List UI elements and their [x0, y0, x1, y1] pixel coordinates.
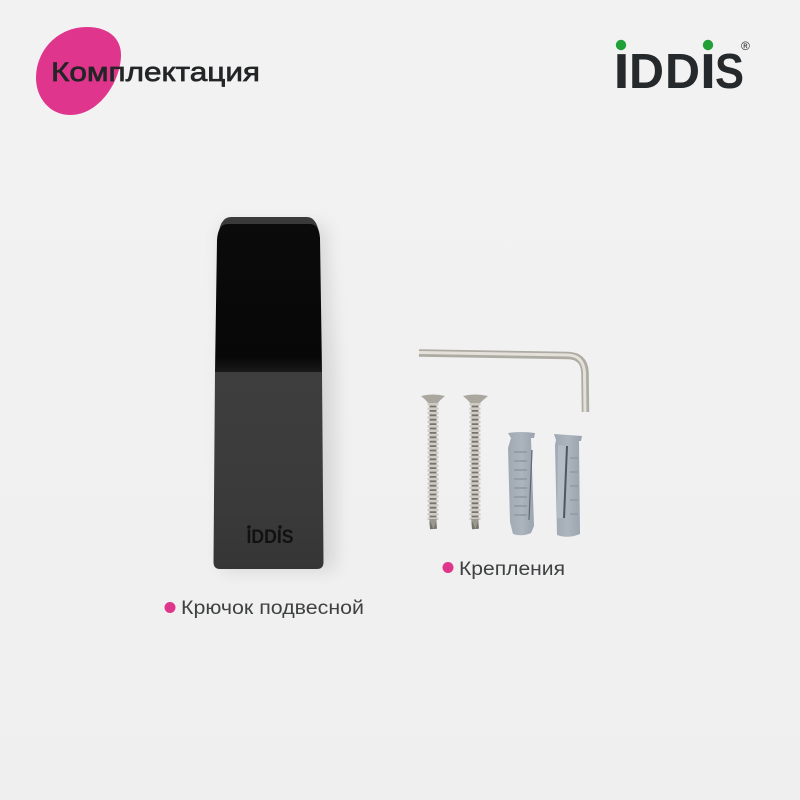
hook matte body: [214, 372, 324, 569]
logo: IDDIS: I: [700, 45, 716, 99]
pink blob: [36, 27, 121, 115]
logo: IDDIS: S: [715, 45, 744, 99]
hex key wrench: [419, 352, 586, 412]
plug 1: [508, 432, 535, 535]
screw 1: [421, 394, 445, 529]
hook engraved logo: IDDIS: [246, 527, 294, 548]
wall plugs: [508, 432, 582, 537]
logo: IDDIS: I: [614, 45, 630, 99]
logo: IDDIS: D: [629, 45, 664, 99]
screws: [421, 394, 488, 529]
hook glossy face: [215, 224, 322, 372]
heading text: Комплектация: [51, 57, 260, 87]
plug 2: [554, 434, 582, 537]
hook top bevel: [218, 217, 320, 240]
screw 2: [463, 394, 488, 529]
logo: IDDIS: D: [665, 45, 700, 99]
logo: IDDIS: ®: [741, 39, 750, 53]
label: Крепления: Крепления: [459, 559, 565, 580]
heading: Комплектация with pink blob: [36, 27, 260, 115]
logo: IDDIS: [614, 39, 750, 99]
hook shadow: [222, 225, 335, 570]
product: hanging hook: [214, 217, 335, 570]
label: Крючок подвесной: Крючок подвесной: [181, 598, 364, 619]
